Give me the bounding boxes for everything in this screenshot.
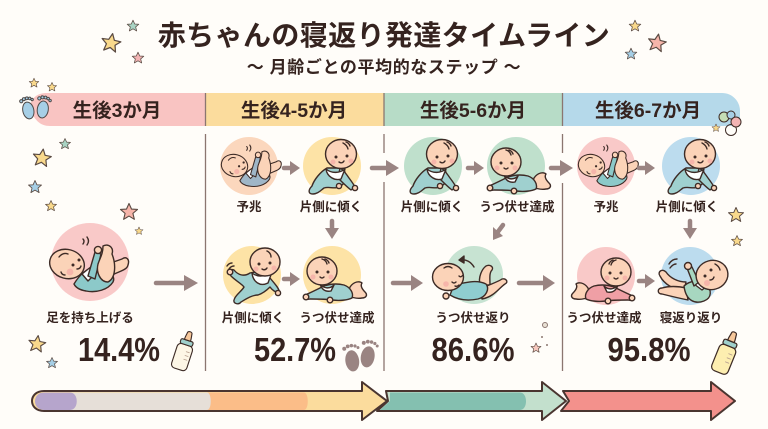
icon: right side stars (728, 208, 744, 246)
header: 3 months (30, 93, 205, 126)
illustration: baby lifting feet (46, 223, 129, 301)
illustration: waving tilt (223, 246, 281, 304)
label: rolling: うつ伏せ返り (435, 310, 511, 325)
arrow: down (683, 221, 697, 239)
arrow: diagonal (493, 225, 503, 240)
panel: 5-6 months (393, 137, 555, 368)
arrow (393, 275, 423, 291)
decorative star and dots (531, 322, 548, 352)
illustration: sign (219, 137, 281, 195)
label: sign: 予兆 (236, 200, 262, 214)
label: tummy: うつ伏せ達成 (479, 199, 555, 214)
decorative stars: title left (100, 20, 144, 63)
arrow: between columns top (551, 160, 573, 176)
progress arrow: third stage (561, 382, 735, 420)
icon: decorative stars left (28, 138, 143, 234)
progress arrow: first stage (32, 382, 387, 420)
illustration: rolling back (658, 247, 731, 305)
progress arrow: second stage (377, 382, 566, 420)
illustration: tummy reached (487, 137, 550, 195)
label: tilting: 片側に傾く (300, 199, 362, 214)
percentage: 14.4%: 14.4% (78, 331, 160, 368)
header band (30, 93, 740, 126)
header: 5-6 months: 生後5-6か月 (420, 100, 526, 122)
header: 6-7 months: 生後6-7か月 (595, 100, 701, 122)
percentage: 52.7%: 52.7% (254, 331, 336, 368)
panel: 3 months (28, 138, 198, 372)
header: 5-6 months (384, 93, 562, 126)
arrow (284, 272, 300, 286)
label: tilting: 片側に傾く (222, 310, 284, 325)
header: 4-5 months: 生後4-5か月 (241, 100, 347, 122)
panel: 6-7 months (566, 137, 744, 376)
icon: milk bottle (170, 329, 198, 372)
illustration: rolling from tummy (432, 246, 507, 304)
arrow (156, 275, 198, 291)
arrow: down (325, 221, 339, 239)
subtitle: 〜 月齢ごとの平均的なステップ 〜 (247, 57, 521, 77)
icon: baby footprints blue (19, 95, 52, 120)
label: tummy: うつ伏せ達成 (299, 310, 375, 325)
icon: rattle (712, 111, 741, 136)
icon: brown footprints (342, 339, 379, 373)
label: rolling back: 寝返り返り (660, 310, 722, 325)
label: sign: 予兆 (593, 200, 619, 214)
arrow (519, 275, 555, 291)
label: lifting feet: 足を持ち上げる (46, 310, 134, 325)
arrow (284, 161, 300, 175)
icon: milk bottle large (710, 329, 743, 376)
label: tilting: 片側に傾く (656, 199, 718, 214)
percentage: 86.6%: 86.6% (432, 331, 514, 368)
illustration: tummy reached (303, 246, 366, 304)
illustration: tilting (662, 137, 720, 195)
icon: small stars above footprints (29, 78, 57, 91)
label: tummy: うつ伏せ達成 (566, 310, 642, 325)
illustration: sign (576, 137, 638, 195)
illustration: pink tummy (572, 247, 635, 305)
header: 6-7 months (563, 93, 740, 126)
arrow (468, 161, 484, 175)
title: 赤ちゃんの寝返り発達タイムライン (158, 20, 610, 51)
header: 3 months: 生後3か月 (73, 100, 161, 122)
decorative stars: title right (625, 20, 667, 59)
illustration: tilting (404, 137, 462, 195)
header: 4-5 months (206, 93, 384, 126)
percentage: 95.8%: 95.8% (608, 331, 690, 368)
label: tilting: 片側に傾く (401, 199, 463, 214)
icon: star pair (28, 334, 58, 368)
arrow (639, 274, 655, 288)
illustration: tilting to one side (303, 137, 361, 195)
arrow: between columns top (372, 160, 399, 176)
panel: 4-5 months (219, 137, 379, 373)
arrow (639, 161, 655, 175)
